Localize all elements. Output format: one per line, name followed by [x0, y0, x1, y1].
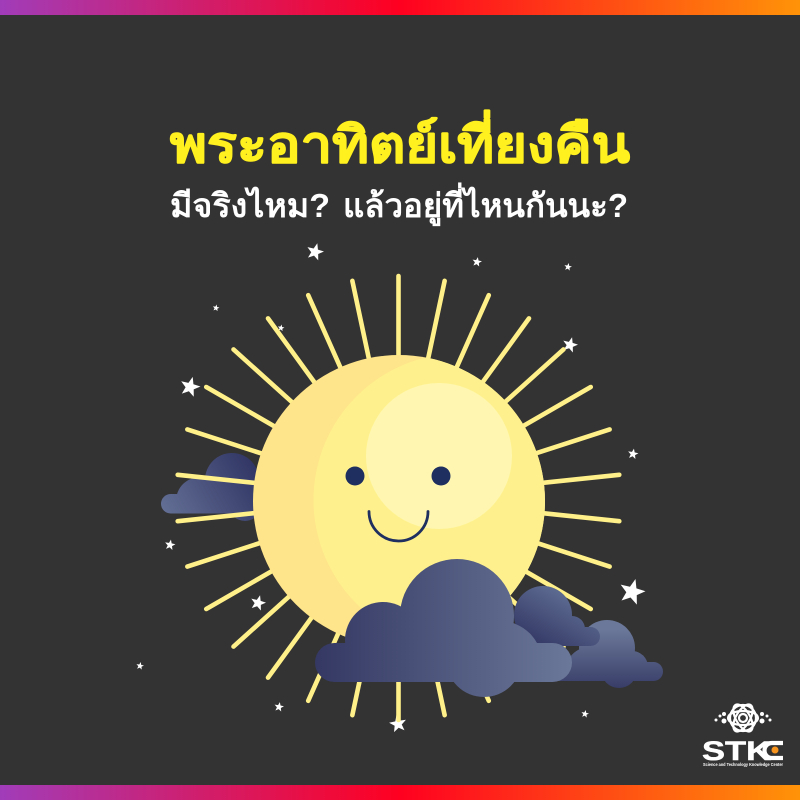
- left eye: [346, 466, 364, 486]
- logo dots: [714, 712, 772, 724]
- sun rays: [178, 276, 619, 720]
- subtitle: [170, 182, 628, 227]
- logo wordmark: STK: [702, 736, 772, 766]
- left cloud: [161, 453, 256, 521]
- logo letter C: [765, 743, 783, 758]
- title: พระอาทิตย์เที่ยงคืน: [170, 110, 630, 173]
- right eye: [432, 466, 450, 486]
- STKC logo: [702, 702, 783, 767]
- logo atom icon: [728, 702, 758, 734]
- subtitle: มีจริงไหม?: [170, 186, 330, 224]
- back cloud right: [558, 620, 663, 688]
- sun lit area: [314, 358, 545, 608]
- logo tagline: Science and Technology Knowledge Center: [703, 762, 783, 767]
- sun disc: [253, 355, 545, 647]
- subtitle: แล้วอยู่ที่ไหนกันนะ?: [343, 182, 628, 227]
- main cloud: [315, 559, 572, 705]
- smile: [369, 512, 428, 541]
- top gradient bar: [0, 0, 800, 15]
- sun: [253, 355, 545, 637]
- sun highlight: [366, 383, 512, 529]
- stars: [136, 241, 648, 733]
- logo orange dot: [772, 746, 778, 754]
- back cloud middle: [510, 586, 600, 646]
- bottom gradient bar: [0, 785, 800, 800]
